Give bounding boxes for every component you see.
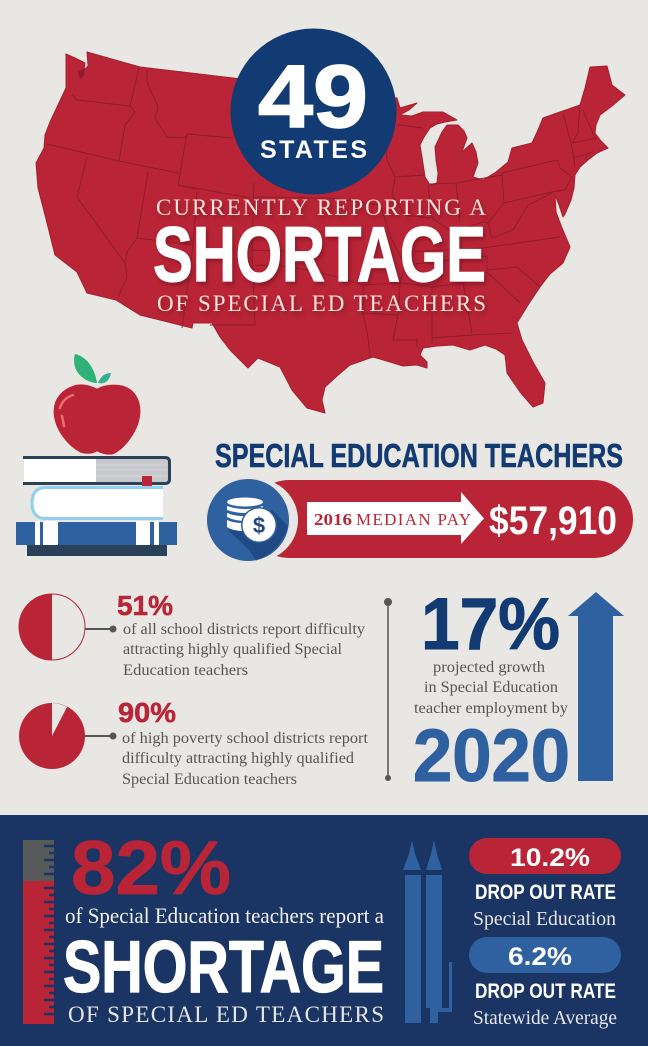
map headline: [153, 195, 486, 316]
icon: pens: [403, 840, 452, 1023]
icon: apple: [53, 354, 141, 455]
stat: 82 percent: 82%: [71, 826, 231, 911]
pay amount: $57,910: [489, 499, 617, 543]
median pay banner: [207, 479, 633, 561]
icon: coins: $: [253, 513, 265, 538]
stat: 17 percent growth: 17%: [421, 584, 560, 665]
label: drop out rate statewide average: [473, 980, 617, 1029]
arrow: median pay label: MEDIAN PAY: [356, 510, 471, 529]
stat: 90 percent: Special Education teachers: [122, 771, 297, 788]
map headline: SHORTAGE: [153, 210, 486, 298]
stat: 17 percent growth: teacher employment by: [414, 700, 568, 717]
map headline: CURRENTLY REPORTING A: [156, 195, 486, 220]
text: report a: of Special Education teachers report a: [65, 903, 384, 928]
badge: 49 states: 49: [258, 46, 368, 146]
stat: 90 percent: difficulty attracting highly qualified: [122, 750, 354, 767]
US map with state borders: [36, 52, 625, 413]
pie chart: 51 percent: [19, 594, 116, 660]
heading: shortage: SHORTAGE: [63, 927, 384, 1008]
vertical connector: [384, 598, 392, 781]
stat: 51 percent: Education teachers: [123, 662, 248, 679]
icon: apple on stack of books: [16, 354, 177, 556]
icon: coins: [207, 479, 289, 561]
arrow: growth: [568, 592, 624, 781]
stat: 51 percent: attracting highly qualified Special: [123, 641, 343, 658]
pill: 10.2 percent: 10.2%: [510, 844, 590, 872]
arrow: median pay label: [307, 492, 484, 544]
stat: 17 percent growth: in Special Education: [424, 679, 558, 696]
pill: 6.2 percent: 6.2%: [508, 943, 572, 971]
stat: 17 percent growth: projected growth: [433, 659, 545, 676]
map headline: OF SPECIAL ED TEACHERS: [157, 291, 486, 316]
label: drop out rate statewide average: Statewide Average: [473, 1007, 617, 1029]
label: drop out rate special education: [473, 881, 616, 930]
label: drop out rate special education: Special Education: [473, 908, 616, 930]
pill: 6.2 percent: [469, 937, 621, 973]
stat: 17 percent growth: 2020: [413, 714, 570, 797]
panel: bottom navy band: [0, 815, 648, 1046]
stat: 51 percent: of all school districts report difficulty: [123, 621, 365, 638]
pill: 10.2 percent: [469, 838, 621, 874]
arrow: median pay label: 2016: [314, 510, 352, 529]
badge: 49 states: STATES: [260, 136, 367, 164]
label: drop out rate special education: DROP OUT RATE: [475, 881, 616, 904]
stat: 51 percent: [19, 590, 365, 679]
badge: 49 states: [230, 28, 396, 194]
bottom book: [16, 521, 177, 556]
pie chart: 90 percent: [19, 703, 116, 769]
stat: 90 percent: of high poverty school districts report: [122, 730, 369, 747]
text: of special ed teachers: OF SPECIAL ED TEACHERS: [68, 1002, 384, 1027]
stat: 17 percent growth: [413, 584, 624, 797]
stat: 90 percent: 90%: [118, 697, 176, 728]
stat: 90 percent: [19, 697, 369, 788]
middle book: [32, 488, 163, 518]
icon: ruler: [23, 840, 54, 1024]
stat: 51 percent: 51%: [117, 590, 173, 621]
label: drop out rate statewide average: DROP OUT RATE: [475, 980, 616, 1003]
top book: [23, 458, 170, 495]
